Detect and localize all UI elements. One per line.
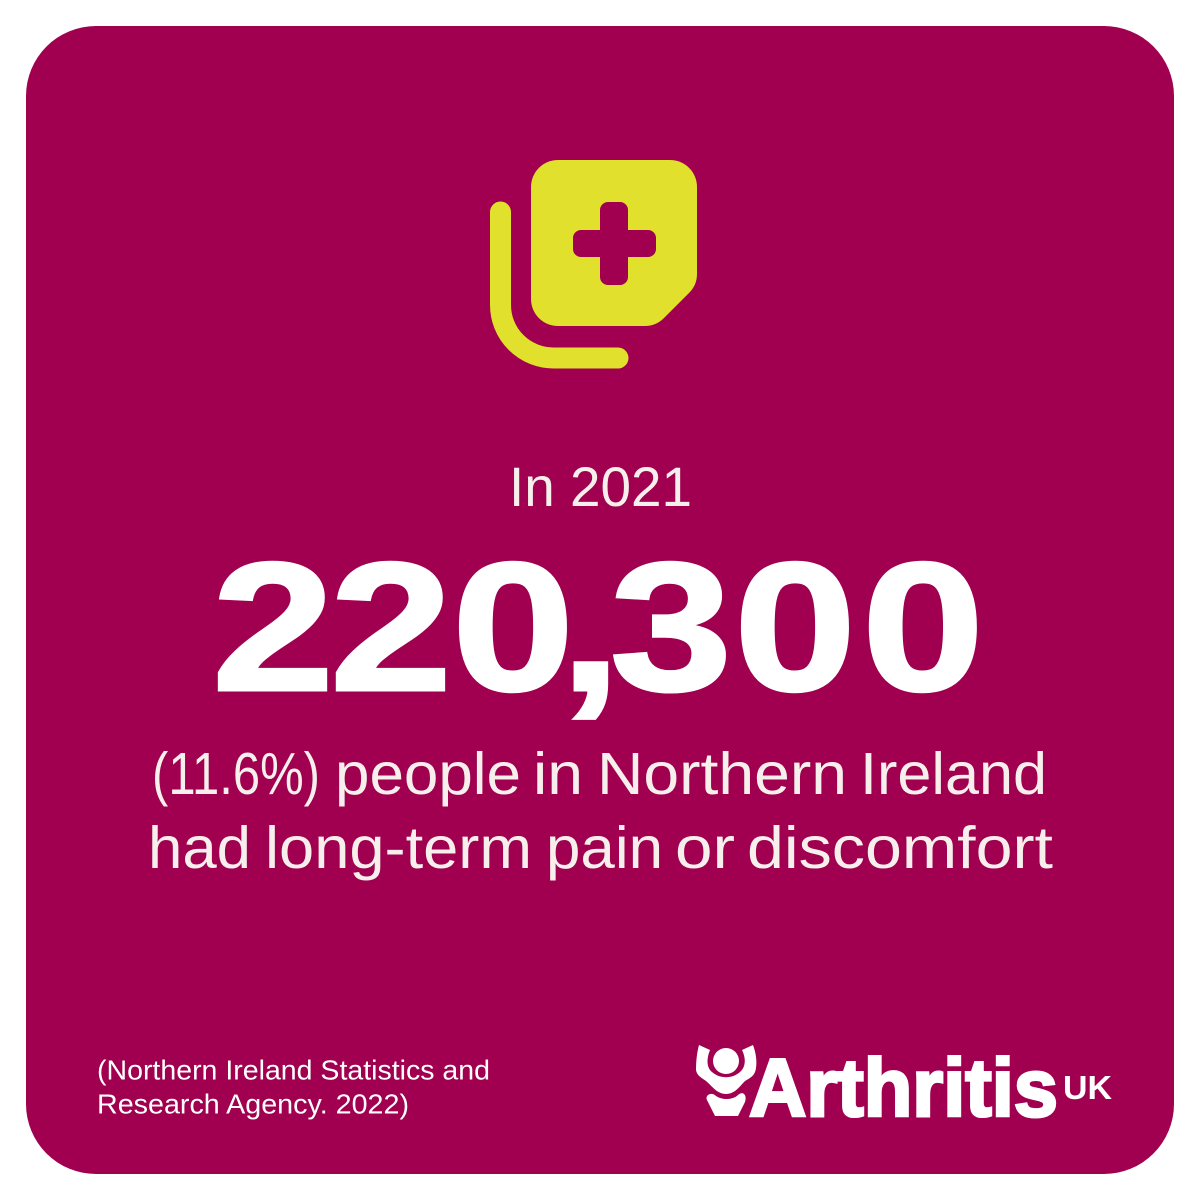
text: source citation: Research Agency. 2022) xyxy=(97,1088,409,1120)
text: description: pain xyxy=(546,815,663,881)
text: description xyxy=(148,741,1053,881)
text: description: Northern xyxy=(597,741,847,807)
icon: medical notes with plus xyxy=(500,160,697,358)
text: description: long-term xyxy=(265,815,532,881)
text: year: In 2021 xyxy=(509,455,692,518)
heading: headline number: 220,300 xyxy=(212,524,984,729)
text: description: discomfort xyxy=(747,815,1053,881)
text: Arthritis wordmark: Arthritis xyxy=(749,1043,1058,1134)
icon: logo figure xyxy=(696,1045,756,1116)
text: UK: UK xyxy=(1063,1069,1112,1106)
text: source citation xyxy=(97,1054,490,1120)
text: description: had xyxy=(148,815,251,881)
text: description: or xyxy=(675,815,735,881)
text: description: Ireland xyxy=(860,741,1047,807)
logo: Arthritis UK xyxy=(696,1043,1112,1134)
text: description: in xyxy=(533,741,583,807)
text: description: people xyxy=(335,741,521,807)
text: source citation: (Northern Ireland Statistics and xyxy=(97,1054,490,1086)
text: description: (11.6%) xyxy=(152,741,320,807)
